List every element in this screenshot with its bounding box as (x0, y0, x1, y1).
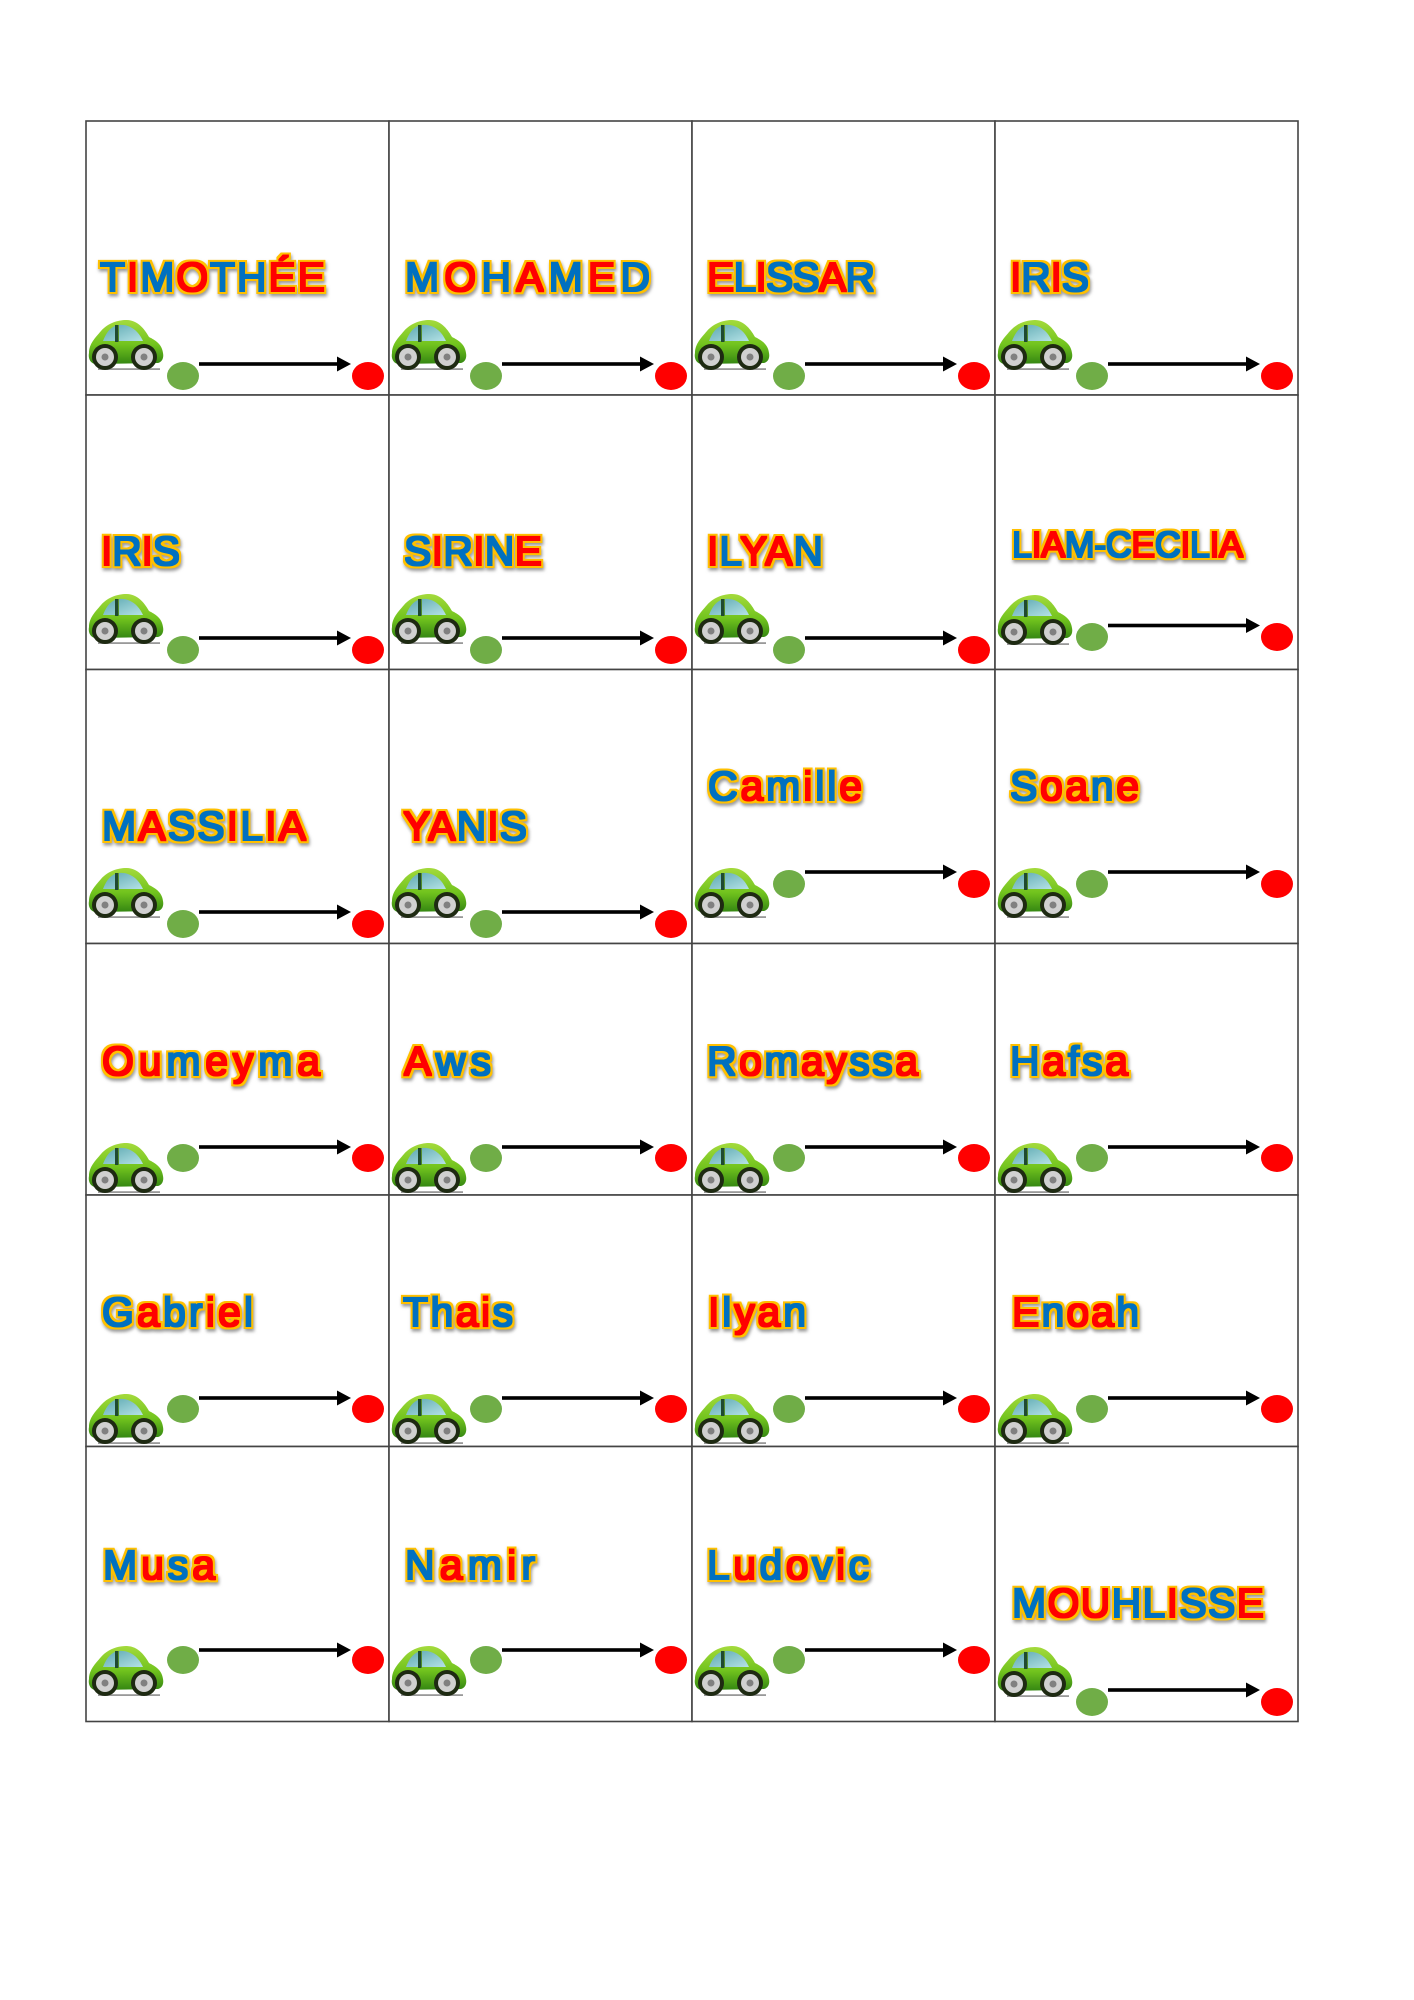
arrow (199, 904, 351, 920)
cell: Massilia (86, 670, 389, 944)
cell: Gabriel (86, 1195, 389, 1446)
name: LIAM-CECILIA (1012, 524, 1243, 565)
start dot (773, 1144, 805, 1172)
name: Namir (405, 1542, 535, 1588)
name: MOHAMED (405, 254, 650, 300)
start dot (1076, 1395, 1108, 1423)
start dot (1076, 870, 1108, 898)
icon: car (695, 1394, 769, 1444)
cell: Liam-Cecilia (995, 395, 1298, 670)
cell: Soane (995, 670, 1298, 944)
start dot (470, 910, 502, 938)
arrow (1108, 864, 1260, 880)
end dot (352, 1646, 384, 1674)
end dot (1261, 1688, 1293, 1716)
icon: car (89, 868, 163, 918)
icon: car (998, 1394, 1072, 1444)
arrow (502, 356, 654, 372)
start dot (167, 362, 199, 390)
end dot (1261, 1395, 1293, 1423)
end dot (958, 362, 990, 390)
arrow (1108, 1140, 1260, 1154)
arrow (805, 1642, 957, 1658)
icon: car (89, 1646, 163, 1696)
end dot (958, 870, 990, 898)
arrow (805, 864, 957, 880)
arrow (502, 904, 654, 920)
name: Enoah (1012, 1289, 1139, 1335)
arrow (502, 630, 654, 646)
cell: Thais (389, 1195, 692, 1446)
cell: Musa (86, 1446, 389, 1722)
end dot (655, 636, 687, 664)
arrow (805, 1390, 957, 1406)
end dot (352, 636, 384, 664)
start dot (773, 636, 805, 664)
cell: Romayssa (692, 944, 995, 1195)
cell: Mohamed (389, 121, 692, 395)
icon: car (695, 1646, 769, 1696)
end dot (655, 1395, 687, 1423)
name: MOUHLISSE (1012, 1580, 1264, 1626)
end dot (352, 910, 384, 938)
name: Hafsa (1010, 1038, 1128, 1084)
end dot (958, 1144, 990, 1172)
end dot (1261, 362, 1293, 390)
start dot (773, 1646, 805, 1674)
icon: car (392, 320, 466, 370)
start dot (167, 1395, 199, 1423)
cell: Ilyan (692, 1195, 995, 1446)
cell: Timothée (86, 121, 389, 395)
start dot (470, 1144, 502, 1172)
name: Romayssa (707, 1038, 918, 1084)
name: Camille (708, 763, 862, 809)
name: Aws (404, 1038, 491, 1084)
arrow (502, 1642, 654, 1658)
name: Thais (403, 1289, 513, 1335)
arrow (199, 1642, 351, 1658)
cell: Namir (389, 1446, 692, 1722)
icon: car (998, 1647, 1072, 1697)
name: TIMOTHÉE (100, 254, 325, 300)
start dot (1076, 1688, 1108, 1716)
icon: car (695, 1143, 769, 1193)
cell: Ludovic (692, 1446, 995, 1722)
name: ELISSAR (707, 254, 875, 300)
arrow (805, 356, 957, 372)
arrow (1108, 618, 1260, 633)
start dot (167, 636, 199, 664)
end dot (655, 1646, 687, 1674)
name: MASSILIA (102, 803, 307, 849)
start dot (773, 362, 805, 390)
cell: Oumeyma (86, 944, 389, 1195)
icon: car (695, 868, 769, 918)
icon: car (998, 320, 1072, 370)
end dot (958, 636, 990, 664)
start dot (470, 1395, 502, 1423)
end dot (352, 1395, 384, 1423)
cell: Elissar (692, 121, 995, 395)
icon: car (392, 1143, 466, 1193)
icon: car (89, 320, 163, 370)
arrow (502, 1390, 654, 1406)
name: IRIS (101, 528, 180, 574)
end dot (958, 1646, 990, 1674)
start dot (1076, 1144, 1108, 1172)
icon: car (89, 1394, 163, 1444)
end dot (958, 1395, 990, 1423)
name: Ilyan (708, 1289, 806, 1335)
arrow (502, 1140, 654, 1154)
cell: Iris (995, 121, 1298, 395)
start dot (773, 870, 805, 898)
start dot (167, 1144, 199, 1172)
cell: Iris 2 (86, 395, 389, 670)
name: SIRINE (404, 528, 542, 574)
end dot (1261, 870, 1293, 898)
start dot (773, 1395, 805, 1423)
start dot (470, 636, 502, 664)
arrow (1108, 1682, 1260, 1698)
arrow (1108, 356, 1260, 372)
start dot (470, 362, 502, 390)
end dot (655, 910, 687, 938)
icon: car (695, 594, 769, 644)
start dot (167, 1646, 199, 1674)
start dot (167, 910, 199, 938)
cell: Mouhlisse (995, 1446, 1298, 1722)
end dot (1261, 1144, 1293, 1172)
icon: car (998, 595, 1072, 645)
cell: Hafsa (995, 944, 1298, 1195)
name: Ludovic (707, 1542, 869, 1588)
icon: car (392, 1646, 466, 1696)
icon: car (392, 1394, 466, 1444)
end dot (1261, 623, 1293, 651)
arrow (1108, 1390, 1260, 1406)
icon: car (89, 594, 163, 644)
name: Oumeyma (102, 1038, 320, 1084)
icon: car (89, 1143, 163, 1193)
cell: Aws (389, 944, 692, 1195)
end dot (352, 1144, 384, 1172)
arrow (805, 630, 957, 646)
arrow (199, 1390, 351, 1406)
cell: Ilyan caps (692, 395, 995, 670)
arrow (199, 1140, 351, 1154)
name: ILYAN (707, 528, 823, 574)
start dot (1076, 623, 1108, 651)
cell: Sirine (389, 395, 692, 670)
name: IRIS (1010, 254, 1089, 300)
cell: Camille (692, 670, 995, 944)
arrow (199, 630, 351, 646)
icon: car (392, 868, 466, 918)
arrow (199, 356, 351, 372)
name: Soane (1010, 763, 1139, 809)
arrow (805, 1140, 957, 1154)
icon: car (392, 594, 466, 644)
start dot (470, 1646, 502, 1674)
icon: car (998, 868, 1072, 918)
name: Gabriel (102, 1289, 253, 1335)
cell: Enoah (995, 1195, 1298, 1446)
icon: car (695, 320, 769, 370)
end dot (655, 1144, 687, 1172)
cell: Yanis (389, 670, 692, 944)
end dot (352, 362, 384, 390)
end dot (655, 362, 687, 390)
icon: car (998, 1143, 1072, 1193)
start dot (1076, 362, 1108, 390)
name: YANIS (403, 803, 527, 849)
name: Musa (103, 1542, 215, 1588)
